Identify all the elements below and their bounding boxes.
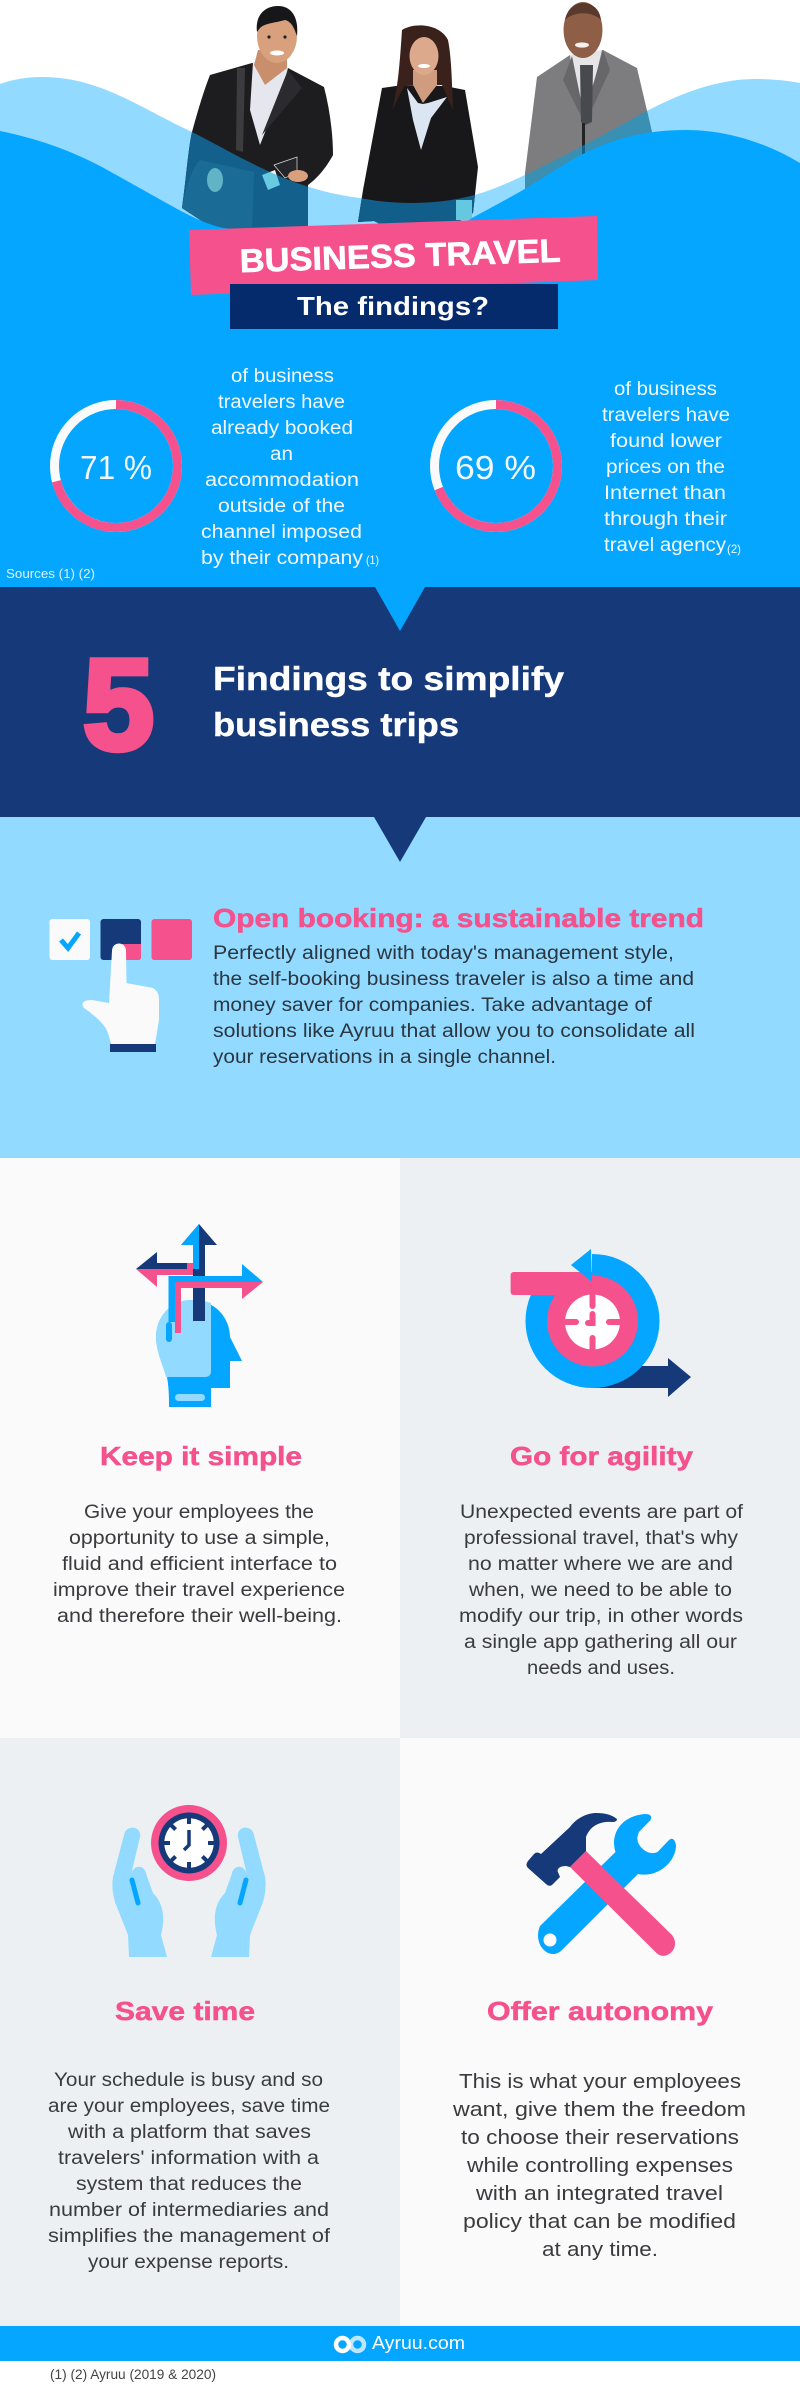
description: are your employees, save time <box>48 2096 330 2117</box>
stat: 71 percent <box>54 366 379 569</box>
panel: open booking <box>0 817 800 1158</box>
stat text left <box>201 366 379 569</box>
donut chart 71% <box>54 404 178 528</box>
description: simplifies the management of <box>48 2226 331 2247</box>
navy panel: 5 findings <box>0 587 800 817</box>
stat text left: already booked <box>211 418 353 439</box>
description: want, give them the freedom <box>452 2099 746 2121</box>
people tinted through wave <box>182 111 652 229</box>
description: system that reduces the <box>76 2174 302 2195</box>
description <box>459 1502 744 1679</box>
description: improve their travel experience <box>53 1580 345 1601</box>
description: with a platform that saves <box>67 2122 311 2143</box>
stat text right: travelers have <box>602 405 730 426</box>
description: opportunity to use a simple, <box>69 1528 330 1549</box>
description: your reservations in a single channel. <box>213 1047 556 1068</box>
description: professional travel, that's why <box>464 1528 739 1549</box>
navy panel: 5 findings: business trips <box>213 706 459 743</box>
description: when, we need to be able to <box>468 1580 732 1601</box>
header hero <box>0 2 800 588</box>
icon: head with arrows <box>136 1224 263 1407</box>
icon: booking hand <box>50 919 192 1052</box>
description: fluid and efficient interface to <box>62 1554 337 1575</box>
three business travelers <box>182 2 652 235</box>
description <box>452 2071 746 2261</box>
panel: save time <box>0 1738 400 2326</box>
description: at any time. <box>542 2239 658 2261</box>
description: Your schedule is busy and so <box>54 2070 323 2091</box>
heading: Open booking: a sustainable trend <box>213 903 704 933</box>
description <box>213 943 695 1068</box>
stat text right <box>602 379 741 556</box>
stat text left: (1) <box>366 553 379 567</box>
donut chart 69% <box>434 404 558 528</box>
description: your expense reports. <box>88 2252 289 2273</box>
man with bag <box>182 6 333 235</box>
description: no matter where we are and <box>468 1554 733 1575</box>
description: number of intermediaries and <box>49 2200 329 2221</box>
description: and therefore their well-being. <box>57 1606 342 1627</box>
stat text left: channel imposed <box>201 522 362 543</box>
pink ribbon <box>189 216 598 295</box>
description: Perfectly aligned with today's management style, <box>213 943 674 964</box>
stat text left: outside of the <box>218 496 345 517</box>
description: solutions like Ayruu that allow you to consolidate all <box>213 1021 695 1042</box>
stat text right: prices on the <box>606 457 725 478</box>
subtitle box <box>230 284 558 329</box>
description: money saver for companies. Take advantage of <box>213 995 653 1016</box>
icon: hands holding clock <box>112 1805 266 1957</box>
stat text right: of business <box>614 379 717 400</box>
big number 5: 5 <box>83 633 154 777</box>
findings heading: Findings to simplify <box>213 660 565 697</box>
description: policy that can be modified <box>463 2211 736 2233</box>
heading: Keep it simple <box>100 1441 302 1471</box>
icon: Ayruu logo <box>336 2338 364 2351</box>
arrow pointer blue <box>375 587 425 631</box>
panel: go for agility <box>400 1158 800 1738</box>
source footnote: (1) (2) Ayruu (2019 & 2020) <box>50 2366 216 2382</box>
subtitle: The findings? <box>297 291 489 321</box>
light blue wave <box>0 77 800 300</box>
stat text right: Internet than <box>604 483 726 504</box>
stat text right: through their <box>604 509 728 530</box>
stat: 69 percent <box>434 379 741 556</box>
panel: keep it simple <box>0 1158 400 1738</box>
title: BUSINESS TRAVEL <box>239 232 561 279</box>
description: needs and uses. <box>527 1658 675 1679</box>
donut chart 71%: 71 % <box>80 449 152 486</box>
description <box>48 2070 331 2273</box>
heading: Save time <box>115 1996 255 2026</box>
stat text left: travelers have <box>218 392 345 413</box>
icon: clock with arrows <box>511 1249 691 1397</box>
description: while controlling expenses <box>466 2155 733 2177</box>
description: to choose their reservations <box>461 2127 739 2149</box>
icon: hammer and wrench <box>526 1813 676 1956</box>
description: This is what your employees <box>459 2071 741 2093</box>
title banner <box>189 216 598 329</box>
donut chart 69%: 69 % <box>455 449 536 486</box>
stat text left: an <box>270 444 293 465</box>
stat text right: found lower <box>610 431 723 452</box>
heading: Go for agility <box>510 1441 694 1471</box>
bright blue wave and background <box>0 130 800 588</box>
stat text right: travel agency <box>604 535 727 556</box>
description: travelers' information with a <box>58 2148 319 2169</box>
footer bar <box>0 2326 800 2361</box>
brand name: Ayruu.com <box>372 2333 465 2353</box>
woman in black suit <box>358 25 478 224</box>
description: Give your employees the <box>84 1502 314 1523</box>
man in grey suit <box>525 2 652 210</box>
stat text left: by their company <box>201 548 364 569</box>
stat text left: of business <box>231 366 334 387</box>
description: Unexpected events are part of <box>460 1502 744 1523</box>
sources note: Sources (1) (2) <box>6 566 95 581</box>
stat text left: accommodation <box>205 470 359 491</box>
stat text right: (2) <box>727 542 741 556</box>
arrow pointer navy <box>374 817 426 862</box>
description <box>53 1502 345 1627</box>
description: modify our trip, in other words <box>459 1606 743 1627</box>
description: with an integrated travel <box>475 2183 723 2205</box>
description: the self-booking business traveler is also a time and <box>213 969 694 990</box>
description: a single app gathering all our <box>464 1632 738 1653</box>
heading: Offer autonomy <box>487 1996 714 2026</box>
panel: offer autonomy <box>400 1738 800 2326</box>
